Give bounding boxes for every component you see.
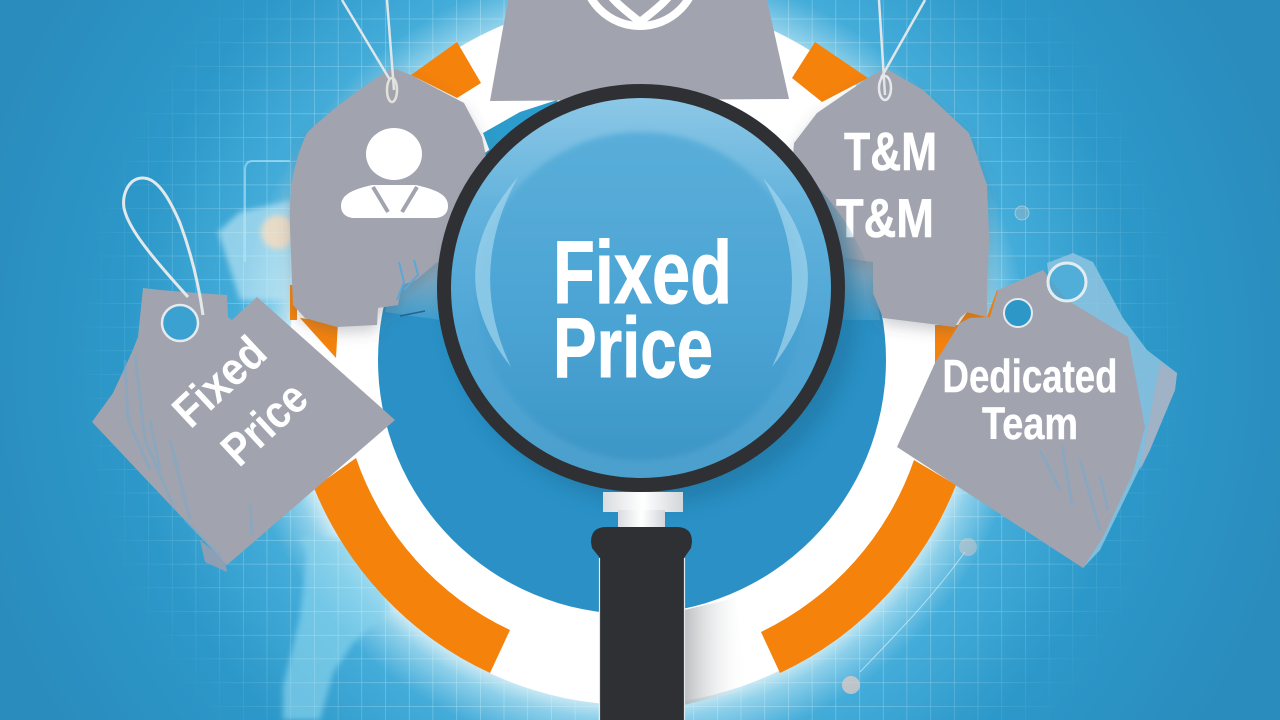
person torn edge xyxy=(385,250,470,320)
icon: person xyxy=(341,128,448,218)
lens highlight right xyxy=(763,178,808,367)
knot xyxy=(387,78,397,102)
tag: dedicated team xyxy=(897,253,1177,568)
orange segment: right jagged xyxy=(935,290,1000,363)
string loop xyxy=(124,178,203,315)
label: price: Price xyxy=(211,371,318,476)
tag: person xyxy=(290,0,495,327)
T&M torn edge xyxy=(820,250,880,320)
handle shadow on ring xyxy=(684,598,748,705)
hole xyxy=(162,305,198,341)
lens label: fixed: Fixed xyxy=(553,222,732,322)
label: T&M second line: T&M xyxy=(836,187,934,249)
ring xyxy=(1048,263,1086,301)
lens highlight left xyxy=(475,177,518,367)
orange segment: top left xyxy=(411,42,481,98)
magnifying glass xyxy=(444,91,858,720)
blue strip above lens xyxy=(483,100,565,165)
hole xyxy=(1004,299,1032,327)
strings xyxy=(879,0,925,95)
tag streaks xyxy=(1040,445,1108,530)
label: fixed: Fixed xyxy=(162,325,276,437)
label: team: Team xyxy=(982,398,1078,449)
orange arc: bottom left xyxy=(314,458,510,673)
tag: fixed price xyxy=(92,178,395,572)
icon: globe xyxy=(583,0,697,26)
neck xyxy=(618,510,665,530)
tag: T&M xyxy=(790,0,989,327)
ring xyxy=(290,0,1000,705)
handle edge lines xyxy=(600,558,684,720)
knot xyxy=(879,76,891,100)
lens xyxy=(444,91,838,485)
orange segment: top right xyxy=(792,42,868,102)
lens label: price: Price xyxy=(553,301,713,396)
under sheet xyxy=(200,540,227,572)
label: T&M: T&M xyxy=(844,122,937,182)
lens inner disc xyxy=(477,132,805,460)
orange arc: bottom right xyxy=(761,460,956,673)
back sheet xyxy=(1047,253,1177,568)
label: dedicated: Dedicated xyxy=(942,350,1118,402)
orange segment: left upper xyxy=(290,285,338,358)
lens shadow xyxy=(478,188,867,506)
tag: globe top xyxy=(490,0,789,101)
handle xyxy=(591,527,692,720)
tag streaks xyxy=(125,355,252,558)
strings xyxy=(342,0,394,90)
collar xyxy=(603,492,683,512)
